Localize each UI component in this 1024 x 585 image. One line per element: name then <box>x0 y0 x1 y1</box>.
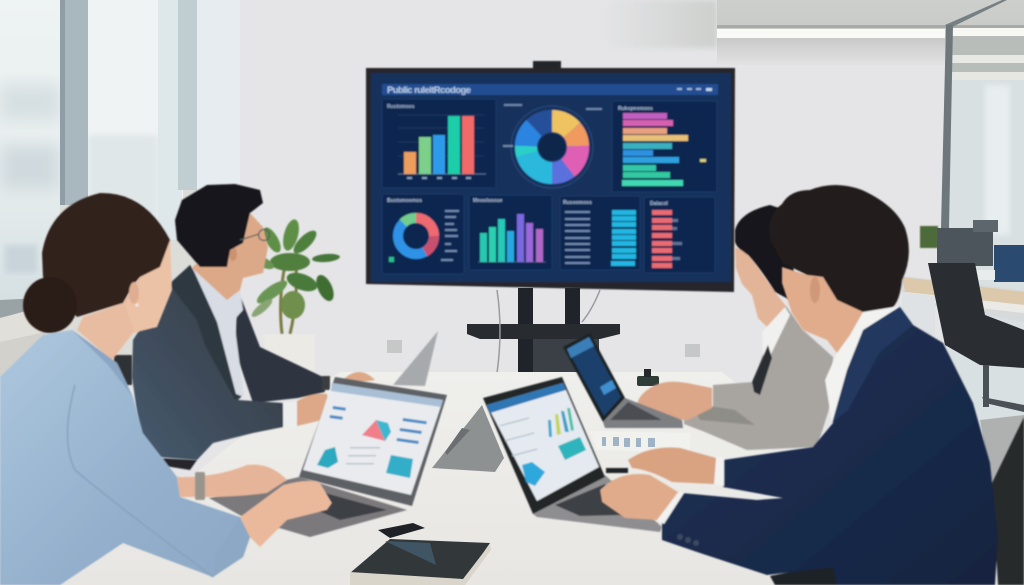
back laptop lid (left) <box>393 331 438 386</box>
jacket <box>684 306 833 450</box>
wall sockets <box>387 340 700 357</box>
panel: cyan table: Rusoomoos <box>563 200 592 206</box>
shirt <box>0 330 250 585</box>
suit <box>132 265 283 460</box>
panel: horizontal bar chart: Rukopeomoos <box>618 106 653 112</box>
hair <box>769 185 909 312</box>
conference table <box>60 372 1000 585</box>
ear <box>810 277 820 303</box>
left laptop <box>209 377 447 537</box>
ear <box>129 282 139 304</box>
hair <box>175 184 263 267</box>
display frame <box>366 68 735 292</box>
potted plant <box>248 218 340 372</box>
person: man in navy suit <box>600 185 1024 585</box>
panel: ring chart <box>382 194 464 274</box>
panel: multicolour column chart <box>469 195 552 270</box>
watch band <box>322 376 330 390</box>
panel: column chart <box>382 99 496 188</box>
earring <box>135 303 139 307</box>
pen <box>606 468 628 473</box>
chair right <box>992 417 1024 585</box>
panel: cyan table <box>560 196 640 270</box>
shirt collar <box>825 307 897 423</box>
shirt <box>192 267 244 397</box>
person: woman in grey jacket <box>638 205 833 450</box>
hair <box>735 205 800 300</box>
neck and face <box>77 240 170 360</box>
phone <box>378 523 425 538</box>
suit <box>662 307 998 585</box>
neck and face <box>192 213 268 300</box>
far laptop <box>563 333 683 428</box>
face and neck <box>735 247 786 330</box>
hair bun <box>23 277 77 333</box>
chair <box>114 355 132 385</box>
ceiling and lights <box>600 0 1024 65</box>
notebook <box>350 539 491 585</box>
neck and face <box>782 267 863 353</box>
person: man with glasses <box>132 184 375 460</box>
hair <box>42 193 170 317</box>
panel: horizontal bar chart <box>612 101 717 192</box>
panel: column chart: Rustomoos <box>387 104 415 110</box>
panel: ring chart: Bustomoomos <box>387 198 422 204</box>
shirt cuff <box>283 401 297 428</box>
glass partition and back office <box>902 0 1024 482</box>
dashboard header bar <box>382 84 718 96</box>
window on left <box>0 0 240 380</box>
tent device <box>432 405 504 472</box>
hands <box>638 382 712 420</box>
sleeve buttons <box>677 534 699 546</box>
panel: red bars: Dalacol <box>650 201 668 207</box>
display screen <box>371 73 731 282</box>
monitor stand <box>467 288 620 376</box>
right laptop <box>483 377 662 532</box>
hands <box>177 465 287 497</box>
shirt cuffs <box>714 457 724 486</box>
stamp object <box>637 369 659 386</box>
display camera <box>533 61 561 69</box>
panel: red bars <box>644 197 715 273</box>
paper document <box>590 431 691 453</box>
right laptop screen <box>487 383 599 501</box>
person: woman in light blue shirt <box>0 193 332 585</box>
wall display <box>366 61 735 292</box>
glasses <box>240 230 270 240</box>
panel: donut chart <box>503 104 602 188</box>
suit back arm <box>235 290 325 403</box>
hands <box>297 394 332 426</box>
left laptop screen <box>303 383 443 495</box>
chair base below suit <box>770 562 840 585</box>
shirt collar <box>762 307 790 372</box>
watch <box>195 472 205 500</box>
dashboard header bar: Public ruleitRcodoge <box>387 85 471 96</box>
hands <box>628 448 716 484</box>
panel: multicolour column chart: Mnoolooose <box>473 198 503 204</box>
